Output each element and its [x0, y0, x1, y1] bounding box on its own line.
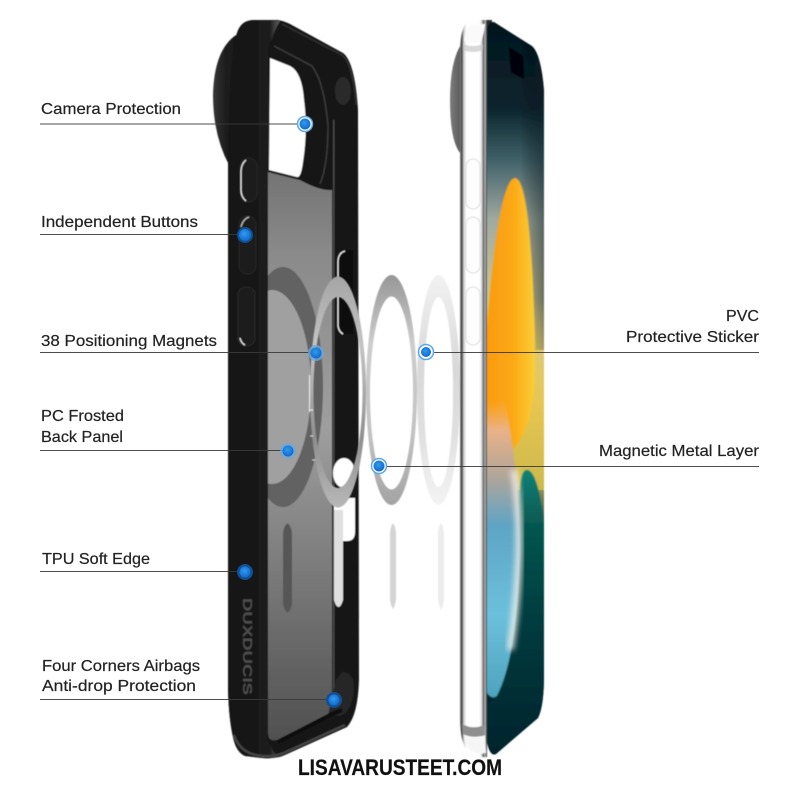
case pill slot white: [334, 510, 343, 607]
wallpaper blue highlight: [510, 470, 519, 650]
inner right divider: [333, 120, 334, 710]
frame top shade: [463, 44, 483, 52]
label: camera protection: Camera Protection: [41, 101, 181, 118]
button highlight one: [241, 160, 246, 201]
label: frosted back panel: [41, 408, 124, 446]
corner airbag bottom: [328, 672, 354, 716]
wallpaper blue shape: [485, 400, 520, 698]
frame bottom shade: [462, 724, 485, 737]
marker: frosted back panel: [280, 443, 296, 459]
case back panel: [268, 172, 332, 740]
label: corner airbags: Anti-drop Protection: [42, 678, 196, 695]
phone metal frame: [460, 20, 492, 757]
icon: camera bump on case: [213, 35, 242, 165]
label: frosted back panel: Back Panel: [41, 429, 123, 446]
phone camera bump: [450, 43, 468, 153]
marker: camera protection: [298, 116, 312, 132]
case pill slot dark: [283, 523, 292, 613]
leader lines: [40, 124, 759, 700]
label: protective sticker: Protective Sticker: [626, 329, 760, 346]
camera window opening: [269, 58, 306, 177]
phone screen: [485, 20, 547, 762]
screen edge shade: [522, 40, 545, 350]
watermark: LISAVARUSTEET.COM: [298, 755, 502, 780]
marker: protective sticker: [418, 344, 434, 360]
case outer frame: [228, 20, 359, 758]
label: corner airbags: Four Corners Airbags: [42, 658, 200, 675]
camera window inner edges: [274, 46, 328, 184]
marker: independent buttons: [237, 227, 253, 243]
small pill layer two: [390, 523, 396, 609]
ring two: magnetic metal layer: [366, 275, 417, 505]
white opening under ring: [334, 498, 355, 541]
frame top cap: [464, 24, 485, 43]
rings: magnet ring layers: [310, 275, 460, 610]
phone volume button two: [466, 217, 480, 273]
case left band: [228, 20, 280, 758]
bottom inner edge: [278, 710, 342, 742]
frame bottom cap: [464, 735, 486, 754]
camera window surround: [268, 40, 340, 190]
ring one: positioning magnets: [310, 276, 366, 508]
brand text: DUXDUCIS: [240, 598, 255, 695]
right button highlight: [338, 251, 345, 334]
label: corner airbags: [42, 658, 200, 695]
screen background: [486, 20, 546, 760]
wallpaper yellow region: [513, 307, 544, 490]
ring three: protective sticker: [417, 275, 460, 505]
button highlight two: [241, 217, 249, 227]
phone volume button one: [466, 159, 480, 209]
marker: positioning magnets: [308, 345, 324, 361]
button slot two: [239, 216, 256, 274]
bottom grey bevel: [234, 725, 345, 756]
magnetic recess ring on panel: [267, 266, 324, 508]
phone side button three: [466, 287, 480, 345]
camera island: [509, 47, 524, 79]
marker: metal layer: [372, 458, 386, 474]
label: metal layer: Magnetic Metal Layer: [599, 443, 760, 460]
button highlight three: [240, 338, 245, 345]
right button slot: [338, 250, 353, 334]
button slot one: [240, 158, 257, 202]
top rim highlight: [282, 24, 356, 105]
marker: airbags: [326, 692, 342, 708]
wallpaper orange shape: [485, 178, 535, 450]
label: positioning magnets: 38 Positioning Magnets: [41, 333, 217, 350]
marker: soft edge: [237, 564, 253, 580]
small pill layer three: [438, 523, 444, 610]
ring one seams: [310, 375, 315, 460]
case: protective phone case: [213, 20, 359, 758]
label: protective sticker: PVC: [726, 308, 759, 325]
label: soft edge: TPU Soft Edge: [42, 551, 150, 568]
label: independent buttons: Independent Buttons: [41, 214, 198, 231]
phone: [450, 20, 547, 762]
corner airbag top: [335, 77, 351, 105]
label: protective sticker: [626, 308, 760, 346]
charge port opening: [333, 458, 355, 488]
button slot three: [238, 287, 255, 346]
wallpaper teal shape: [486, 470, 546, 762]
label: frosted back panel: PC Frosted: [41, 408, 124, 425]
